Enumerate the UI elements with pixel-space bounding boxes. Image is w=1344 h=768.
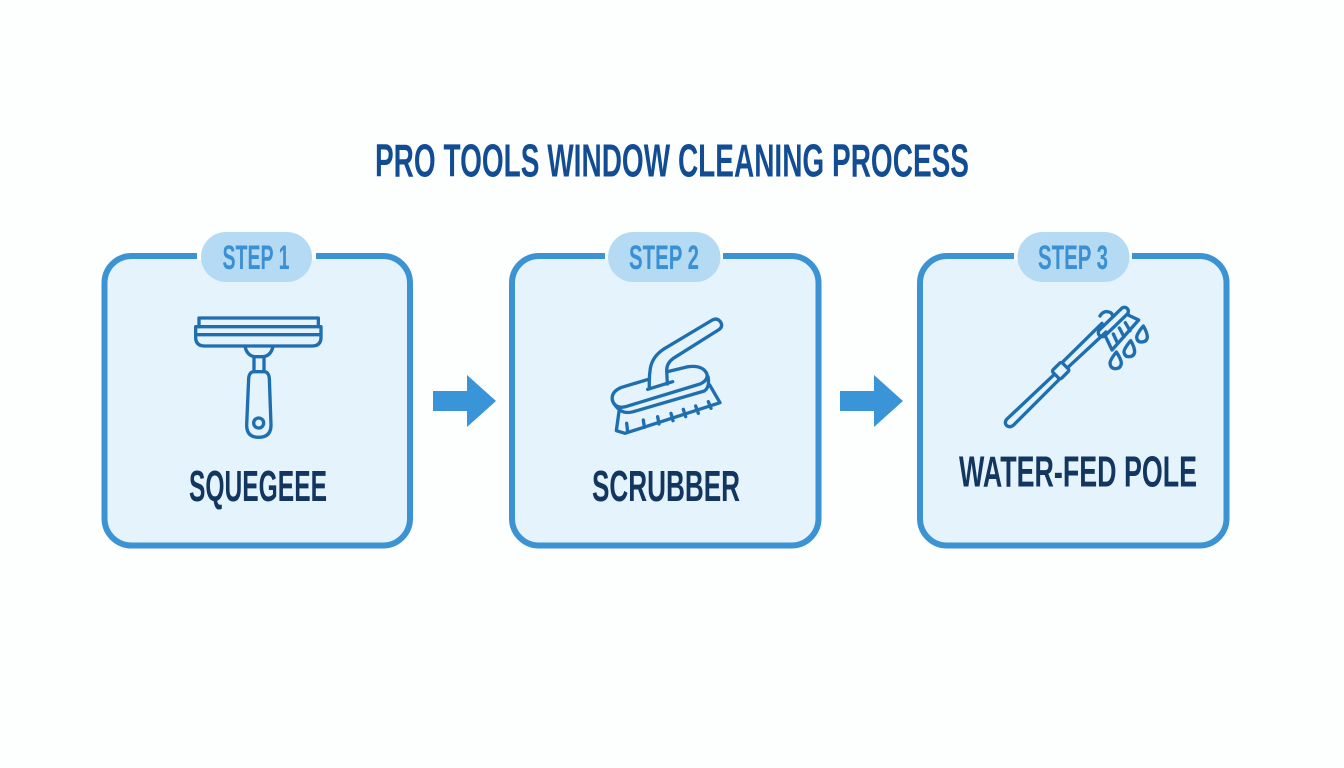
- step 1 badge: [201, 232, 312, 282]
- label: water-fed pole: WATER-FED POLE: [959, 448, 1197, 496]
- step 2 badge: STEP 2: [629, 239, 699, 277]
- title: PRO TOOLS WINDOW CLEANING PROCESS: [375, 134, 969, 186]
- icon: squeegee: [196, 318, 321, 437]
- panel: step 1 squeegee: [104, 232, 410, 546]
- arrow: step 2 to step 3: [840, 375, 903, 427]
- label: squeegee: SQUEGEEE: [189, 462, 327, 511]
- step 2 badge: [608, 232, 720, 282]
- arrow: step 1 to step 2: [433, 375, 496, 427]
- step 1 badge: STEP 1: [222, 239, 290, 277]
- panel: step 3 water-fed pole: [920, 232, 1226, 546]
- step 3 badge: STEP 3: [1038, 239, 1108, 277]
- panel: step 2 scrubber: [512, 232, 818, 546]
- icon: scrub brush: [612, 319, 722, 433]
- icon: water-fed pole: [1005, 306, 1147, 427]
- step 3 badge: [1018, 232, 1130, 282]
- label: scrubber: SCRUBBER: [592, 462, 740, 511]
